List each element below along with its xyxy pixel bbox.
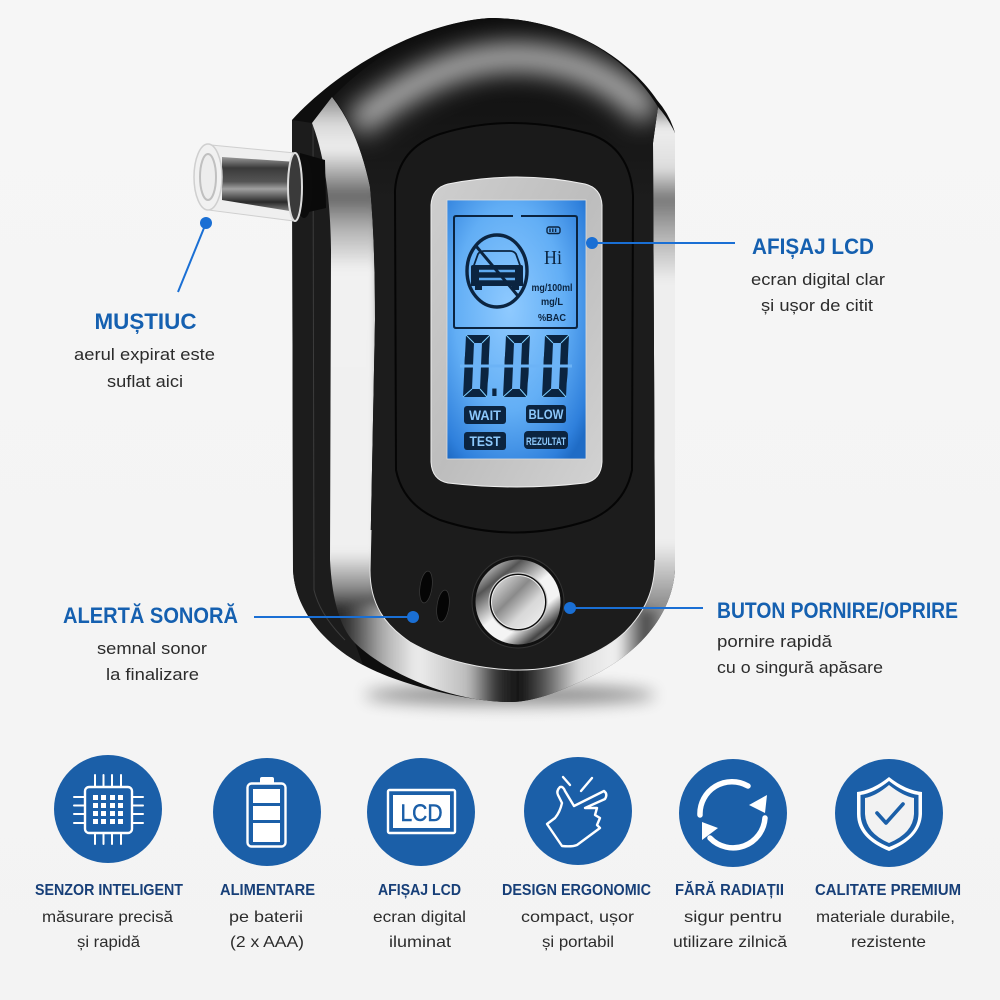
label: și rapidă — [77, 934, 140, 951]
label — [502, 882, 651, 951]
label: CALITATE PREMIUM — [815, 882, 961, 899]
status tag: TEST: TEST — [470, 433, 501, 449]
description: cu o singură apăsare — [717, 658, 883, 677]
leader line — [254, 611, 419, 623]
leader line — [178, 217, 212, 292]
heading: BUTON PORNIRE/OPRIRE — [717, 598, 958, 623]
label: FĂRĂ RADIAȚII — [675, 880, 784, 899]
label: rezistente — [851, 934, 926, 951]
icon: LCD — [367, 758, 475, 866]
label: materiale durabile, — [816, 909, 955, 926]
label: ecran digital — [373, 909, 466, 926]
reading: 0 — [541, 320, 570, 414]
reading — [460, 320, 572, 414]
status tag: BLOW: BLOW — [528, 406, 564, 422]
description: ecran digital clar — [751, 270, 885, 289]
label: utilizare zilnică — [673, 934, 787, 951]
power button — [472, 556, 564, 648]
description: suflat aici — [107, 372, 183, 391]
leader line — [564, 602, 703, 614]
label: iluminat — [389, 934, 452, 951]
label — [815, 882, 961, 951]
description: și ușor de citit — [761, 296, 873, 315]
mode text: mg/100ml — [532, 282, 573, 294]
description — [97, 639, 207, 684]
device body — [280, 18, 690, 715]
icon: no car — [467, 235, 527, 307]
description: aerul expirat este — [74, 345, 215, 364]
description: pornire rapidă — [717, 632, 833, 651]
feature: afișaj LCD — [367, 758, 475, 951]
status tag: WAIT: WAIT — [469, 407, 501, 423]
speaker holes — [418, 570, 451, 623]
label — [673, 880, 787, 951]
reading: 0 — [502, 320, 531, 414]
label — [35, 882, 183, 951]
callout: afișaj LCD — [586, 234, 885, 315]
icon: chip — [54, 755, 162, 863]
label — [373, 882, 466, 951]
status tag: REZULTAT: REZULTAT — [526, 436, 566, 448]
label: ALIMENTARE — [220, 882, 315, 899]
description — [74, 345, 215, 391]
leader line — [586, 237, 735, 249]
description: semnal sonor — [97, 639, 207, 658]
callout: alertă sonoră — [63, 603, 419, 684]
description: la finalizare — [106, 665, 199, 684]
label: măsurare precisă — [42, 909, 173, 926]
callout: buton pornire/oprire — [564, 598, 958, 677]
device shadow — [365, 685, 655, 705]
LCD screen — [431, 177, 602, 487]
mode text: %BAC — [538, 312, 566, 324]
screen recess — [395, 123, 633, 532]
chrome band — [312, 97, 675, 702]
mode text: mg/L — [541, 296, 564, 308]
icon: hand — [524, 757, 632, 865]
icon: LCD: LCD — [400, 800, 442, 827]
heading: AFIȘAJ LCD — [752, 234, 874, 259]
label: compact, ușor — [521, 909, 635, 926]
icon: battery status — [547, 227, 560, 234]
feature: alimentare — [213, 758, 321, 951]
label: sigur pentru — [684, 909, 782, 926]
icon: cycle arrows — [679, 759, 787, 867]
description — [717, 632, 883, 677]
icon: shield — [835, 759, 943, 867]
label: pe baterii — [229, 909, 303, 926]
label: AFIȘAJ LCD — [378, 882, 461, 899]
label: DESIGN ERGONOMIC — [502, 882, 651, 899]
heading: ALERTĂ SONORĂ — [63, 603, 238, 628]
silver bezel — [431, 177, 602, 487]
feature: calitate premium — [815, 759, 961, 951]
callout: muștiuc — [74, 217, 215, 391]
mode text: Hi — [544, 247, 562, 269]
reading: 0 — [462, 320, 491, 414]
status tag: REZULTAT — [524, 431, 568, 449]
reading: . — [490, 351, 499, 407]
label: (2 x AAA) — [230, 934, 304, 951]
label — [220, 882, 315, 951]
description — [751, 270, 885, 315]
mouthpiece — [194, 144, 326, 221]
label: SENZOR INTELIGENT — [35, 882, 183, 899]
label: și portabil — [542, 934, 614, 951]
feature: design ergonomic — [502, 757, 651, 951]
feature: fără radiații — [673, 759, 787, 951]
feature: senzor inteligent — [35, 755, 183, 951]
icon: battery — [213, 758, 321, 866]
mode text — [532, 247, 573, 324]
display — [447, 200, 586, 459]
front panel — [333, 18, 658, 670]
heading: MUȘTIUC — [94, 309, 197, 334]
